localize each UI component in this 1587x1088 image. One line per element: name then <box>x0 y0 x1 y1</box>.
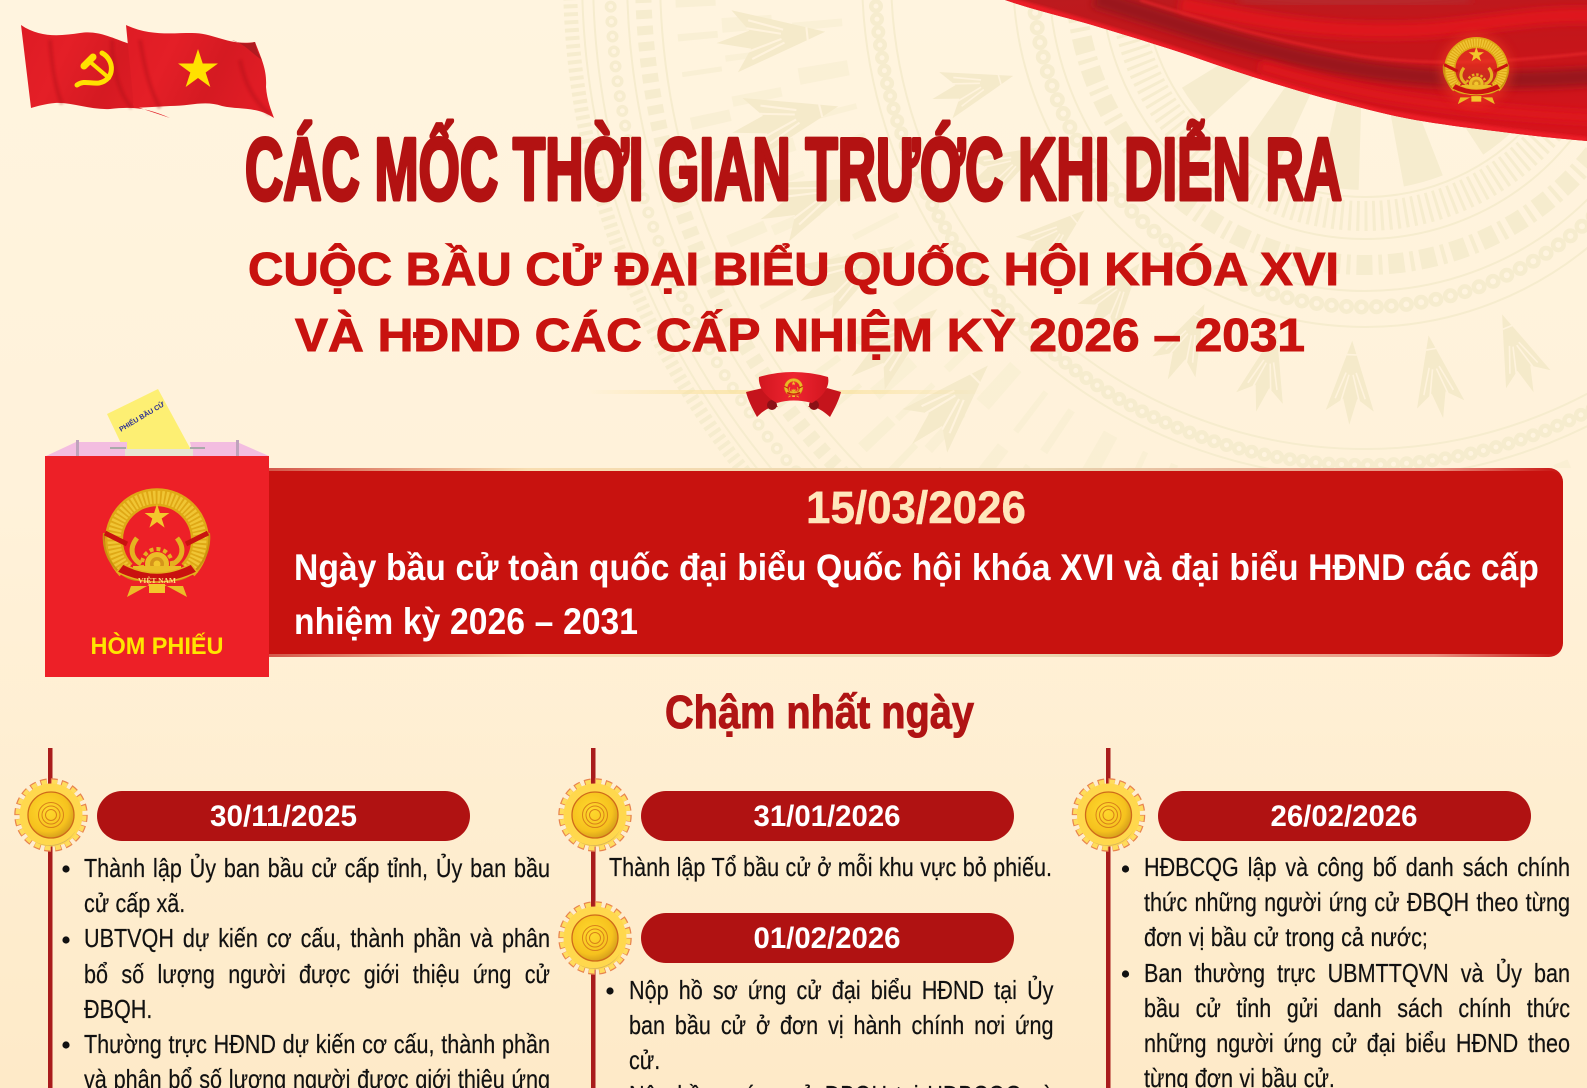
timeline: column 3 <box>1075 748 1531 1088</box>
ballot paper: PHIẾU BẦU CỬ <box>117 399 166 434</box>
text block: column 1: Thường trực HĐND dự kiến cơ cấu, thành phần <box>84 1029 550 1059</box>
text block: column 1: ĐBQH. <box>84 994 152 1024</box>
heading: latest by date: Chậm nhất ngày <box>665 686 974 738</box>
date pill 01/02/2026: 01/02/2026 <box>754 922 900 955</box>
date pill 26/02/2026: 26/02/2026 <box>1270 800 1418 833</box>
date pill 30/11/2025: 30/11/2025 <box>210 800 357 833</box>
icon: party flag <box>21 25 170 118</box>
icon: medal <box>18 782 84 848</box>
date pill 26/02/2026 <box>1158 791 1531 841</box>
banner description text: nhiệm kỳ 2026 – 2031 <box>294 601 637 642</box>
text block: column 2: Nộp hồ sơ ứng cử đại biểu HĐND tại Ủy <box>628 975 1053 1005</box>
date pill 30/11/2025 <box>97 791 470 841</box>
icon: national emblem on ballot box: VIỆT NAM <box>138 576 176 585</box>
icon: medal <box>562 782 628 848</box>
text block: column 3: những người ứng cử đại biểu HĐND theo <box>1144 1028 1570 1058</box>
timeline: column 2 <box>562 748 1014 1088</box>
panel: election day banner <box>269 468 1563 657</box>
subtitle: CUỘC BẦU CỬ ĐẠI BIỂU QUỐC HỘI KHÓA XVI <box>248 243 1339 295</box>
date pill 31/01/2026: 31/01/2026 <box>754 800 900 833</box>
background: bronze drum pattern <box>564 0 1587 468</box>
text block: column 3: HĐBCQG lập và công bố danh sách chính <box>1144 852 1570 882</box>
icon: medal <box>562 904 628 972</box>
date pill 31/01/2026 <box>641 791 1014 841</box>
text block: column 3: Ban thường trực UBMTTQVN và Ủy ban <box>1144 958 1570 988</box>
ballot paper <box>107 389 193 456</box>
date pill 01/02/2026 <box>641 913 1014 963</box>
box label: HÒM PHIẾU <box>90 632 224 660</box>
icon: national emblem on ballot box <box>104 497 209 597</box>
text block: column 2: Thành lập Tổ bầu cử ở mỗi khu vực bỏ phiếu. <box>609 852 1052 882</box>
text block: column 2: ban bầu cử ở đơn vị hành chính nơi ứng <box>628 1010 1053 1040</box>
subtitle <box>248 243 1339 361</box>
text block: column 3: bầu cử tỉnh gửi danh sách chính thức <box>1144 993 1570 1023</box>
banner description text: Ngày bầu cử toàn quốc đại biểu Quốc hội khóa XVI và đại biểu HĐND các cấp <box>294 547 1538 588</box>
text block: column 1: cử cấp xã. <box>84 888 185 918</box>
bullet <box>606 987 614 995</box>
text block: column 1: Thành lập Ủy ban bầu cử cấp tỉnh, Ủy ban bầu <box>84 853 550 883</box>
divider with small ribbon emblem <box>587 372 985 417</box>
ribbon: red silk swoosh top right <box>1000 0 1587 145</box>
ballot box <box>45 389 269 677</box>
icon: national emblem on ribbon <box>1443 43 1509 104</box>
text block: column 3: thức những người ứng cử ĐBQH theo từng <box>1144 887 1570 917</box>
icon: yellow star <box>178 49 218 87</box>
icon: national flag <box>126 25 274 118</box>
text block: column 2: cử. <box>628 1045 660 1075</box>
icon: medal <box>1075 782 1142 848</box>
text block: column 1: UBTVQH dự kiến cơ cấu, thành phần và phân <box>84 923 550 953</box>
text block: column 3: đơn vị bầu cử trong cả nước; <box>1144 922 1428 952</box>
bullets <box>62 865 70 1049</box>
banner date: 15/03/2026 <box>806 482 1026 533</box>
subtitle: VÀ HĐND CÁC CẤP NHIỆM KỲ 2026 – 2031 <box>295 309 1305 361</box>
text block: column 1: bổ số lượng người được giới thiệu ứng cử <box>84 959 550 989</box>
bullets <box>1122 865 1129 978</box>
timeline: column 1 <box>18 748 470 1088</box>
icon: hammer and sickle <box>77 53 111 85</box>
